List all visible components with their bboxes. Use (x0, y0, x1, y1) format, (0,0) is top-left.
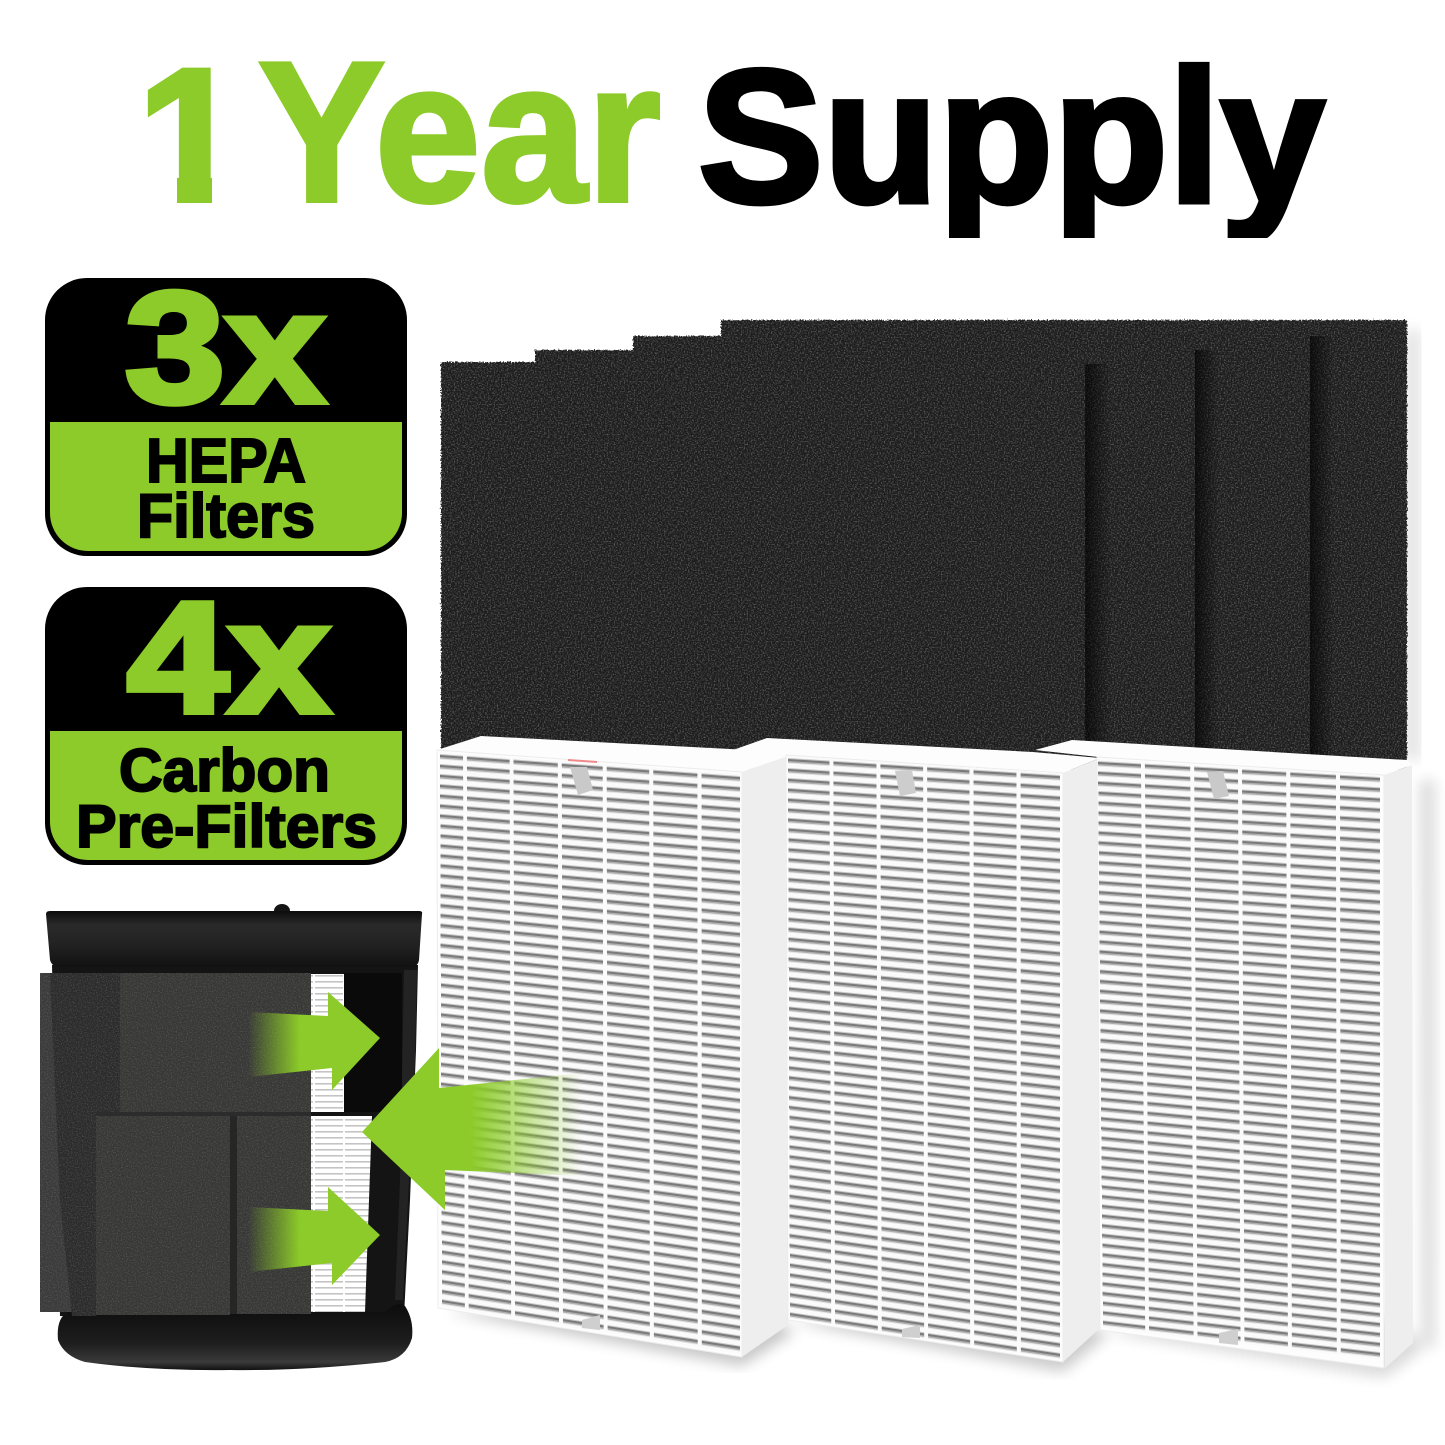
purifier knob (274, 904, 290, 911)
purifier top cap (46, 911, 422, 967)
badge: 3x HEPA filters: HEPA (146, 427, 306, 496)
filter 2 grille (788, 756, 1060, 1359)
badge: 4x carbon pre-filters: Carbon (119, 737, 330, 804)
title: Supply: Supply (698, 31, 1325, 243)
carbon left fold (50, 973, 122, 1316)
purifier right rim (395, 970, 417, 1300)
title: 1: 1 (138, 30, 243, 240)
badge: 3x HEPA filters: Filters (137, 482, 315, 551)
carbon bottom left panel (96, 1116, 230, 1315)
arrow: upper airflow in (248, 992, 380, 1090)
carbon sheet 1 (front) (441, 362, 1111, 770)
badge: 3x HEPA filters (45, 260, 407, 556)
carbon bottom seam (230, 1116, 237, 1314)
arrow: large airflow to purifier (362, 1048, 582, 1210)
title (148, 21, 1328, 244)
HEPA element top (311, 974, 344, 1112)
black inner panel top (344, 973, 402, 1112)
carbon sheet 2 (535, 350, 1219, 770)
panel gap (96, 1112, 311, 1116)
filter 1 grille (440, 752, 740, 1354)
carbon sheet 3 (633, 336, 1334, 770)
filter 3 grille (1098, 759, 1380, 1360)
arrow: lower airflow in (248, 1187, 380, 1285)
badge: 4x carbon pre-filters: 4x (127, 570, 330, 746)
title: Year: Year (258, 21, 661, 244)
HEPA element bottom (311, 1116, 372, 1312)
badge: 4x carbon pre-filters: Pre-Filters (76, 793, 377, 860)
purifier base (58, 1304, 412, 1370)
carbon sheet 4 (rear) (721, 320, 1407, 770)
carbon outer strip (40, 973, 72, 1312)
badge: 3x HEPA filters: 3x (125, 260, 325, 436)
purifier body (52, 965, 418, 1316)
carbon top panel (120, 973, 311, 1113)
badge: 4x carbon pre-filters (45, 570, 407, 865)
carbon bottom right panel (237, 1116, 311, 1314)
